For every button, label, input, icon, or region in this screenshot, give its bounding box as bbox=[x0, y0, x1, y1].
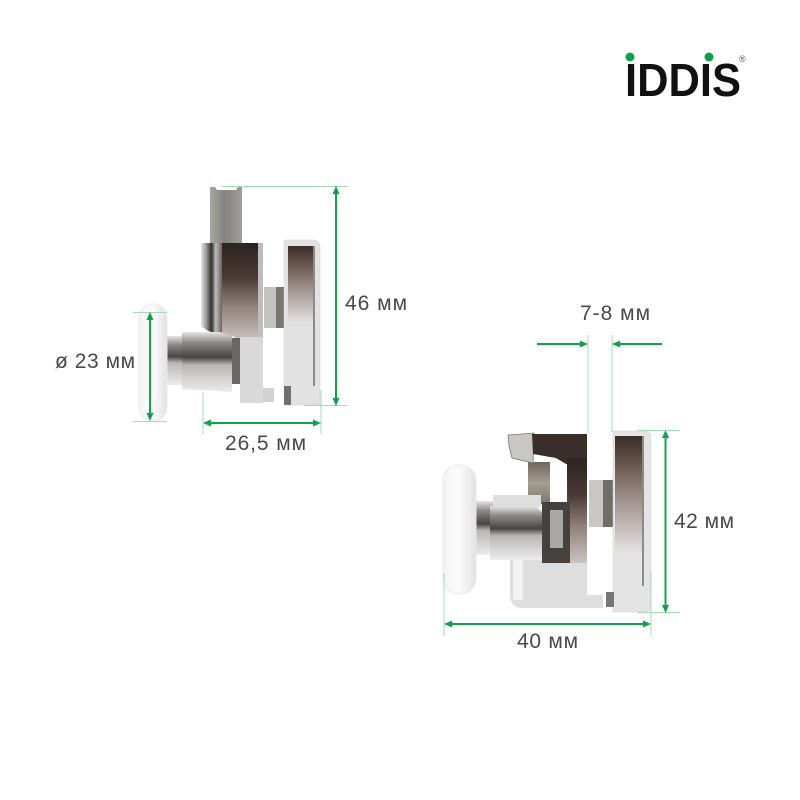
mounting plate bbox=[284, 240, 320, 405]
axle and cylinder bbox=[473, 501, 493, 555]
dimension: 46 mm: 46 мм bbox=[345, 292, 407, 315]
logo: IDDIS: IDDIS bbox=[625, 54, 741, 106]
product photo: roller side view bbox=[139, 187, 320, 421]
dimension: 26,5 mm: 26,5 мм bbox=[225, 432, 306, 455]
axle and cylinder bbox=[166, 336, 184, 385]
dimension: 42 mm: 42 мм bbox=[674, 510, 734, 533]
top bracket cap bbox=[508, 433, 534, 463]
dimension: 40 mm: 40 мм bbox=[517, 630, 578, 653]
window bbox=[542, 502, 570, 563]
top bracket dark arm bbox=[532, 434, 587, 464]
dimension: 46 mm bbox=[222, 186, 407, 406]
dimension: 42 mm bbox=[637, 430, 734, 613]
bearing bbox=[589, 480, 603, 527]
main body right edge bbox=[258, 243, 263, 363]
white wheel bbox=[139, 304, 167, 421]
vertical bracket bbox=[567, 458, 587, 563]
dimension: 7-8 mm bbox=[537, 302, 662, 432]
threaded screw bbox=[528, 462, 550, 504]
white wheel bbox=[443, 465, 476, 594]
window bbox=[230, 338, 240, 384]
lower block bbox=[510, 558, 603, 608]
dimension: 26,5 mm bbox=[203, 390, 321, 455]
mounting plate bbox=[613, 431, 651, 612]
logo: IDDIS: ® bbox=[739, 54, 746, 64]
lower body bbox=[240, 337, 263, 403]
main body upper left stripes bbox=[201, 243, 222, 335]
dimension: 40 mm bbox=[444, 573, 651, 653]
threaded rod bbox=[210, 187, 242, 243]
dimension: wheel diameter 23 mm bbox=[55, 312, 167, 422]
main body dark face bbox=[222, 243, 258, 340]
bearing bbox=[264, 287, 276, 328]
dimension: 7-8 mm: 7-8 мм bbox=[580, 302, 650, 325]
product photo: roller angled view bbox=[443, 431, 651, 612]
dimension: wheel diameter 23 mm: ø 23 мм bbox=[55, 350, 135, 373]
